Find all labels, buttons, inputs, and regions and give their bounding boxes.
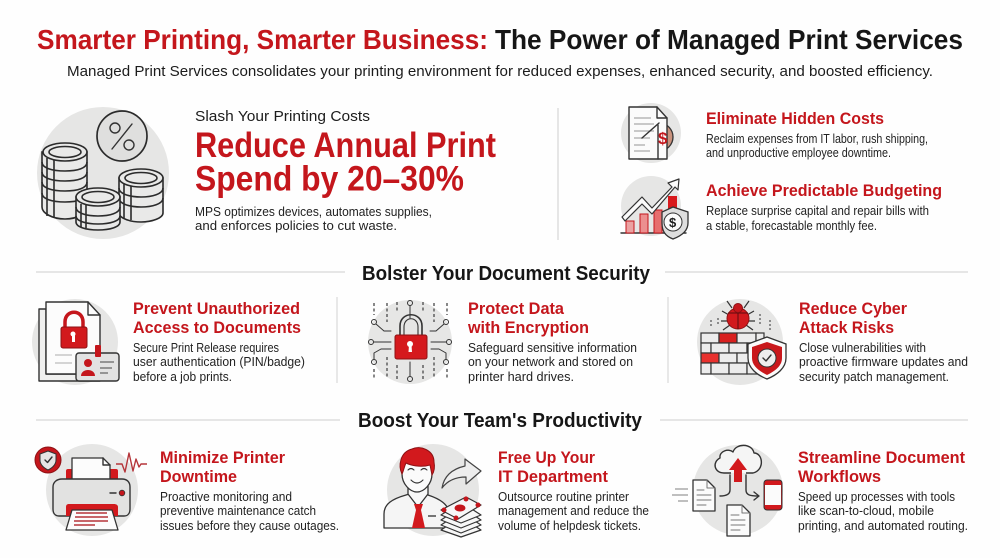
heading: Eliminate Hidden Costs [706,109,884,128]
body text: proactive firmware updates and [799,354,968,369]
heading: Downtime [160,467,237,486]
body text: and enforces policies to cut waste. [195,218,397,233]
icon: document with dollar coin: $ [658,129,668,148]
body text [133,340,305,384]
subtitle: Managed Print Services consolidates your printing environment for reduced expenses, enhanced security, and boosted efficiency. [67,63,933,80]
title: The Power of Managed Print Services [495,24,963,55]
panel: free up IT department [384,444,649,537]
body text: issues before they cause outages. [160,518,339,533]
panel: reduce cyber attack risks [697,299,968,385]
heading: Streamline Document [798,448,965,467]
body text [706,203,929,233]
big statistic [195,126,496,198]
icon: bug, brick wall and shield [697,299,786,385]
icon: rising chart with shield: $ [669,215,677,230]
heading: Workflows [798,467,881,486]
heading: Free Up Your [498,448,595,467]
body text: security patch management. [799,369,949,384]
body text: Speed up processes with tools [798,489,955,504]
body text: preventive maintenance catch [160,503,316,518]
panel: streamline workflows [672,445,968,536]
heading: IT Department [498,467,608,486]
body text: volume of helpdesk tickets. [498,518,641,533]
heading: Achieve Predictable Budgeting [706,181,942,200]
heading: Protect Data [468,299,565,318]
panel: prevent unauthorized access [32,299,305,385]
body text: management and reduce the [498,503,649,518]
body text: Secure Print Release requires [133,340,279,355]
panel: eliminate hidden costs [621,103,928,163]
big statistic: Spend by 20–30% [195,160,464,198]
icon: cloud upload with documents and phone [672,445,783,536]
body text: user authentication (PIN/badge) [133,354,305,369]
body text: MPS optimizes devices, automates supplies, [195,204,432,219]
heading: productivity section: Boost Your Team's Productivity [358,410,643,432]
body text: on your network and stored on [468,354,633,369]
heading: Access to Documents [133,318,301,337]
intro label: Slash Your Printing Costs [195,108,370,125]
title [37,24,963,55]
body text: Reclaim expenses from IT labor, rush shipping, [706,131,928,146]
body text: and unproductive employee downtime. [706,145,891,160]
heading [498,448,608,486]
body text [468,340,637,384]
title: Smarter Printing, Smarter Business: [37,24,488,55]
panel: minimize printer downtime [35,444,339,536]
body text: Safeguard sensitive information [468,340,637,355]
icon: printer with shield and pulse [35,444,147,536]
body text: Close vulnerabilities with [799,340,926,355]
body text: a stable, forecastable monthly fee. [706,218,877,233]
icon: rising chart with shield [621,176,688,239]
icon: document with dollar coin [621,103,681,163]
panel: slash printing costs [37,107,496,239]
body text [798,489,968,533]
icon: coin stacks with percent [37,107,169,239]
icon: locked document with ID badge [32,299,119,385]
heading: Minimize Printer [160,448,285,467]
icon: padlock with circuit traces [368,300,452,384]
body text: Outsource routine printer [498,489,630,504]
heading: with Encryption [467,318,589,337]
heading: Reduce Cyber [799,299,907,318]
heading [467,299,589,337]
body text: Replace surprise capital and repair bills with [706,203,929,218]
heading: Prevent Unauthorized [133,299,300,318]
panel: predictable budgeting [621,176,942,239]
body text [706,131,928,160]
icon: IT worker handing off with cash stack [384,444,481,537]
body text [160,489,339,533]
body text: like scan-to-cloud, mobile [798,503,934,518]
heading [798,448,965,486]
heading [160,448,285,486]
big statistic: Reduce Annual Print [195,126,496,165]
body text: before a job prints. [133,369,232,384]
heading [133,299,301,337]
body text: printing, and automated routing. [798,518,968,533]
body text [799,340,968,384]
panel: protect data [368,299,637,384]
body text [498,489,649,533]
heading [799,299,907,337]
heading: security section: Bolster Your Document Security [362,263,651,285]
body text: printer hard drives. [468,369,574,384]
heading: Attack Risks [799,318,894,337]
body text [195,204,432,233]
body text: Proactive monitoring and [160,489,292,504]
